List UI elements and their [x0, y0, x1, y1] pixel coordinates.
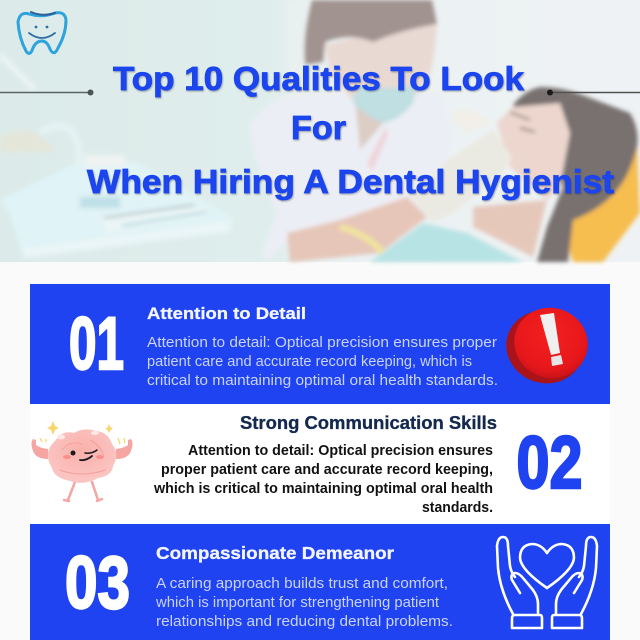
body 01: critical to maintaining optimal oral health standards.	[147, 372, 498, 389]
title: When Hiring A Dental Hygienist	[87, 163, 614, 200]
body 02: proper patient care and accurate record keeping,	[161, 461, 493, 478]
header photo	[0, 0, 640, 262]
heading 03: Compassionate Demeanor	[156, 543, 394, 563]
icon: flexing brain	[32, 421, 132, 501]
heading 02: Strong Communication Skills	[240, 413, 497, 433]
body 01: patient care and accurate record keeping, which is	[147, 353, 472, 370]
body 01: Attention to detail: Optical precision ensures proper	[147, 334, 497, 351]
body 03: relationships and reducing dental problems.	[156, 613, 453, 630]
body 03: which is important for strengthening patient	[155, 594, 440, 611]
connector line left	[0, 90, 94, 96]
panel 01: attention to detail	[30, 284, 610, 404]
connector line right	[547, 90, 640, 96]
body 02: standards.	[422, 499, 493, 516]
body 02: Attention to detail: Optical precision ensures	[188, 442, 493, 459]
body 02	[153, 442, 493, 516]
number 01: 01	[69, 302, 124, 385]
patient	[370, 87, 640, 262]
body 03: A caring approach builds trust and comfort,	[156, 575, 448, 592]
title	[87, 60, 614, 200]
dental hygienist	[250, 0, 453, 262]
number 03: 03	[65, 541, 130, 624]
body 02: which is critical to maintaining optimal oral health	[153, 480, 493, 497]
title: Top 10 Qualities To Look	[113, 60, 525, 97]
title: For	[291, 109, 346, 146]
body 03	[155, 575, 453, 630]
logo: smiling tooth	[18, 12, 66, 53]
icon: hands holding heart	[497, 537, 597, 628]
panel 03: compassionate demeanor	[30, 524, 610, 640]
icon: red exclamation button	[496, 297, 598, 394]
wall strip	[288, 0, 308, 105]
heading 01: Attention to Detail	[147, 304, 306, 323]
panel 02: strong communication skills	[30, 404, 610, 524]
body 01	[147, 334, 498, 389]
number 02: 02	[516, 421, 582, 504]
dental tray	[0, 55, 233, 258]
